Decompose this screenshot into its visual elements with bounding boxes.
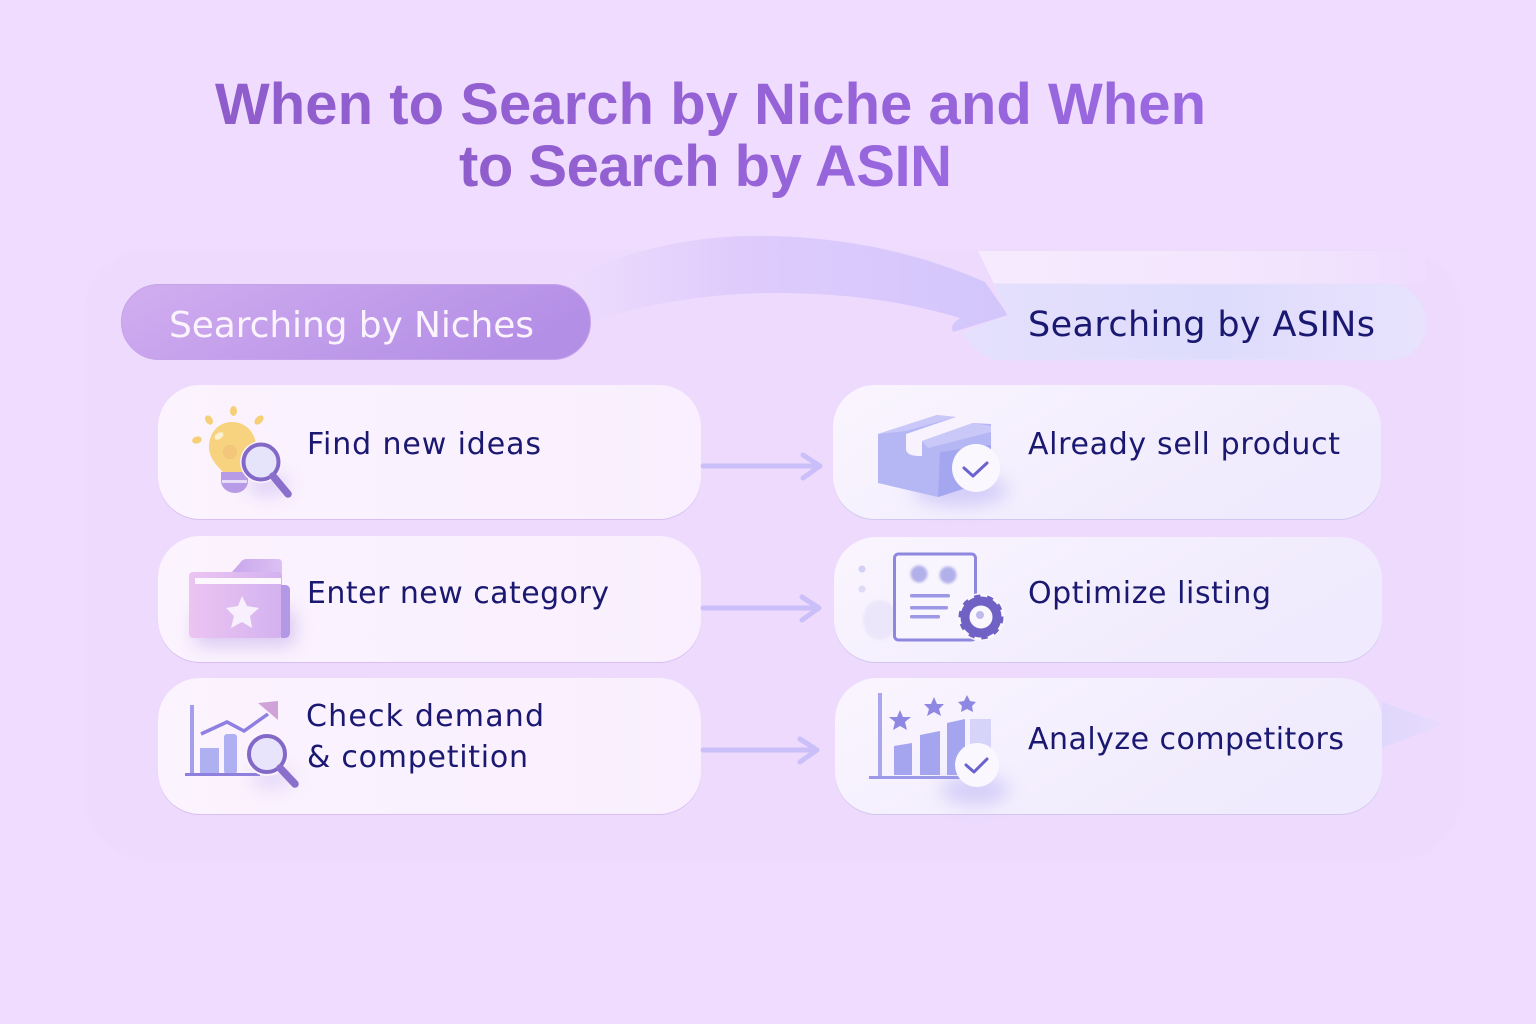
header pill: Searching by Niches: [122, 284, 590, 360]
card: Analyze competitors: [835, 678, 1382, 815]
label: Optimize listing: Optimize listing: [1028, 576, 1271, 611]
label: Already sell product: Already sell product: [1028, 427, 1340, 462]
title: [215, 72, 1206, 199]
title: When to Search by Niche and When: [215, 72, 1206, 137]
header pill: Searching by ASINs: Searching by ASINs: [1028, 305, 1375, 345]
arrow: row 3: [703, 739, 817, 762]
card: Already sell product: [833, 385, 1381, 520]
icon: folder with star: [189, 559, 295, 646]
label: Check demand & competition: Check demand: [306, 699, 544, 734]
label: Enter new category: Enter new category: [307, 576, 609, 611]
arrow: row 1: [703, 455, 820, 478]
header pill: Searching by ASINs: [963, 251, 1426, 360]
arrow: row 2: [703, 597, 819, 620]
card: Check demand & competition: [158, 678, 701, 815]
card: Enter new category: [158, 536, 701, 663]
icon: bar chart with stars and check: [869, 693, 1009, 804]
faint arrow tip at right edge: [1382, 702, 1444, 748]
label: Check demand & competition: [306, 699, 544, 775]
icon: box with check: [878, 415, 1008, 506]
background panel: [85, 250, 1460, 860]
card: Find new ideas: [158, 385, 701, 520]
label: Analyze competitors: Analyze competitors: [1028, 722, 1344, 757]
label: Find new ideas: Find new ideas: [307, 427, 541, 462]
icon: light bulb with magnifier: [191, 406, 290, 495]
label: Check demand & competition: & competition: [307, 740, 528, 775]
icon: document with gear: [858, 554, 1005, 641]
title: to Search by ASIN: [459, 134, 952, 199]
card: Optimize listing: [834, 537, 1382, 663]
icon: chart with magnifier: [185, 701, 295, 788]
header pill: Searching by Niches: Searching by Niches: [169, 305, 534, 346]
curved arrow between headers: [570, 236, 1008, 332]
